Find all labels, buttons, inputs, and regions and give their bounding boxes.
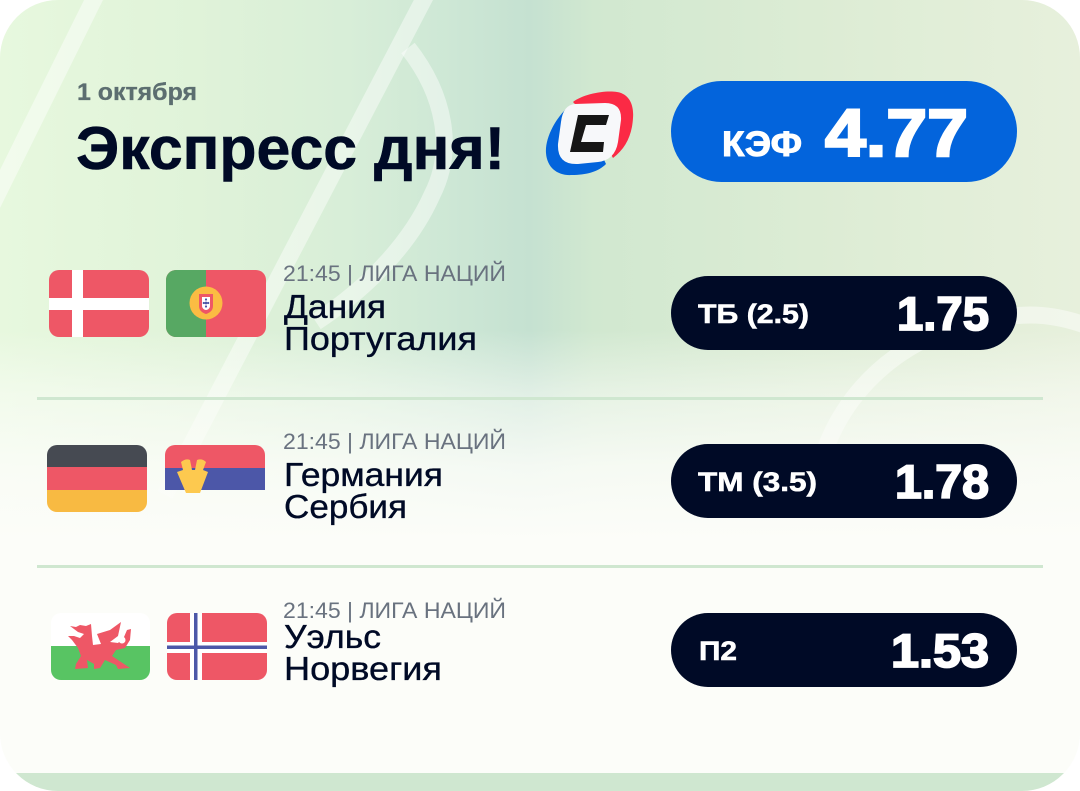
- odds pill: away win: [671, 613, 1017, 687]
- total odds pill: КЭФ: [722, 125, 802, 164]
- odds pill: under 3.5: ТМ (3.5): [698, 467, 817, 497]
- match info: Germany – Serbia: Германия: [284, 456, 443, 493]
- flag: Germany: [47, 445, 147, 512]
- flag: Norway: [167, 613, 267, 680]
- odds pill: away win: 1.53: [891, 624, 989, 677]
- match info: Denmark – Portugal: Дания: [284, 288, 386, 325]
- odds pill: over 2.5: 1.75: [897, 287, 989, 340]
- match info: Wales – Norway: 21:45 | ЛИГА НАЦИЙ: [283, 598, 506, 623]
- match info: Wales – Norway: Норвегия: [284, 650, 442, 687]
- odds pill: under 3.5: [671, 444, 1017, 518]
- match info: Wales – Norway: Уэльс: [284, 618, 381, 655]
- match info: Denmark – Portugal: [283, 261, 506, 357]
- flag: Denmark: [49, 270, 149, 337]
- date: 1 октября: [77, 79, 197, 106]
- flag: Portugal: [166, 270, 266, 337]
- flag: Serbia: [165, 445, 265, 493]
- match info: Wales – Norway: [283, 598, 506, 687]
- odds pill: away win: П2: [699, 636, 737, 666]
- match info: Germany – Serbia: 21:45 | ЛИГА НАЦИЙ: [283, 429, 506, 454]
- total odds pill: [671, 81, 1017, 182]
- match info: Denmark – Portugal: 21:45 | ЛИГА НАЦИЙ: [283, 261, 506, 286]
- odds pill: over 2.5: [671, 276, 1017, 350]
- odds pill: under 3.5: 1.78: [895, 455, 989, 508]
- odds pill: over 2.5: ТБ (2.5): [698, 299, 809, 329]
- icon: bookmaker logo: [546, 91, 633, 175]
- match info: Germany – Serbia: Сербия: [284, 488, 407, 525]
- flag: Wales: [51, 622, 150, 680]
- title: Экспресс дня!: [76, 115, 505, 182]
- match info: Germany – Serbia: [283, 429, 506, 525]
- total odds pill: 4.77: [825, 96, 968, 171]
- match info: Denmark – Portugal: Португалия: [284, 320, 477, 357]
